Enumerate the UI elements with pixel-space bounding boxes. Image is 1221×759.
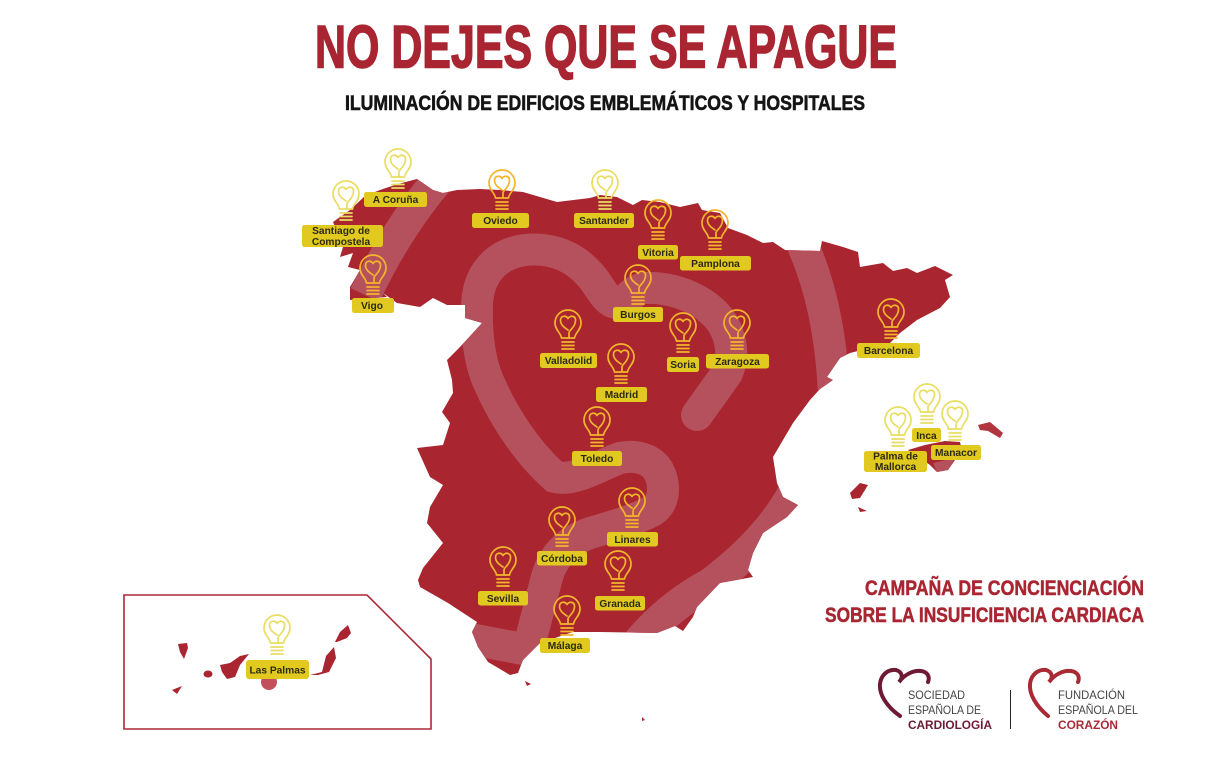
marker: Santiago de Compostela: Santiago de <box>312 226 370 237</box>
marker: Las Palmas: Las Palmas <box>249 666 306 676</box>
logo: Sociedad Española de Cardiología: CARDIOLOGÍA <box>908 719 993 732</box>
marker: Madrid: Madrid <box>605 390 638 401</box>
logo: Sociedad Española de Cardiología: ESPAÑOLA DE <box>908 704 981 717</box>
marker: Linares: Linares <box>614 535 651 546</box>
marker: Las Palmas <box>246 615 309 679</box>
marker: Zaragoza <box>706 310 769 368</box>
marker: Inca <box>912 384 941 442</box>
marker: Burgos: Burgos <box>620 310 656 321</box>
marker: Granada <box>595 551 645 610</box>
marker: Burgos <box>613 265 663 322</box>
marker: Zaragoza: Zaragoza <box>715 357 760 368</box>
marker: Toledo <box>572 407 622 466</box>
marker: Barcelona: Barcelona <box>864 346 913 357</box>
logo: Fundación Española del Corazón: ESPAÑOLA DEL <box>1058 704 1138 717</box>
marker: Sevilla <box>478 547 528 606</box>
marker: Málaga <box>540 596 590 653</box>
campaign callout: CAMPAÑA DE CONCIENCIACIÓN <box>865 576 1144 600</box>
marker: Valladolid <box>540 310 597 368</box>
campaign callout: SOBRE LA INSUFICIENCIA CARDIACA <box>825 604 1144 627</box>
marker: Pamplona: Pamplona <box>691 259 740 270</box>
marker: Barcelona <box>857 299 920 358</box>
logo: Fundación Española del Corazón: FUNDACIÓN <box>1058 689 1125 702</box>
marker: Toledo: Toledo <box>581 454 613 465</box>
marker: Palma de Mallorca: Palma de <box>873 452 918 462</box>
marker: Soria <box>667 313 699 372</box>
subtitle: ILUMINACIÓN DE EDIFICIOS EMBLEMÁTICOS Y HOSPITALES <box>345 90 865 115</box>
marker: Sevilla: Sevilla <box>487 594 519 605</box>
campaign callout <box>825 576 1144 627</box>
map: Balearic Islands <box>850 422 1003 512</box>
marker: Soria: Soria <box>670 360 696 371</box>
logo: Fundación Española del Corazón <box>1030 670 1138 732</box>
marker: Linares <box>607 488 658 546</box>
marker: Córdoba: Córdoba <box>541 554 583 565</box>
marker: Valladolid: Valladolid <box>545 356 592 367</box>
logo: Fundación Española del Corazón: CORAZÓN <box>1058 719 1118 732</box>
title: NO DEJES QUE SE APAGUE <box>315 14 897 80</box>
marker: Santander: Santander <box>579 216 629 227</box>
marker: A Coruña: A Coruña <box>373 195 419 206</box>
marker: Manacor: Manacor <box>935 448 977 459</box>
marker: Santander <box>574 170 634 228</box>
marker: Vitoria: Vitoria <box>642 248 674 259</box>
marker: Córdoba <box>537 507 587 566</box>
marker: Santiago de Compostela: Compostela <box>312 237 370 248</box>
marker: Vigo <box>352 255 394 313</box>
marker: Manacor <box>931 401 981 460</box>
marker: Palma de Mallorca <box>864 407 927 473</box>
marker: A Coruña <box>364 149 427 207</box>
marker: Málaga: Málaga <box>548 641 583 652</box>
logo divider <box>1010 690 1011 729</box>
marker: Pamplona <box>680 210 751 270</box>
marker: Vitoria <box>638 200 678 260</box>
marker: Santiago de Compostela <box>302 181 383 248</box>
inset frame: Canary Islands <box>124 595 431 729</box>
marker: Palma de Mallorca: Mallorca <box>875 462 916 473</box>
marker: Oviedo: Oviedo <box>483 216 518 227</box>
logo: Sociedad Española de Cardiología: SOCIEDAD <box>908 689 965 702</box>
marker: Oviedo <box>472 170 529 228</box>
marker: Granada: Granada <box>599 599 641 610</box>
marker: Vigo: Vigo <box>361 301 383 312</box>
marker: Madrid <box>596 344 647 402</box>
map: peninsular Spain with heart line <box>333 172 953 721</box>
marker: Inca: Inca <box>916 431 937 442</box>
logo: Sociedad Española de Cardiología <box>880 670 993 732</box>
